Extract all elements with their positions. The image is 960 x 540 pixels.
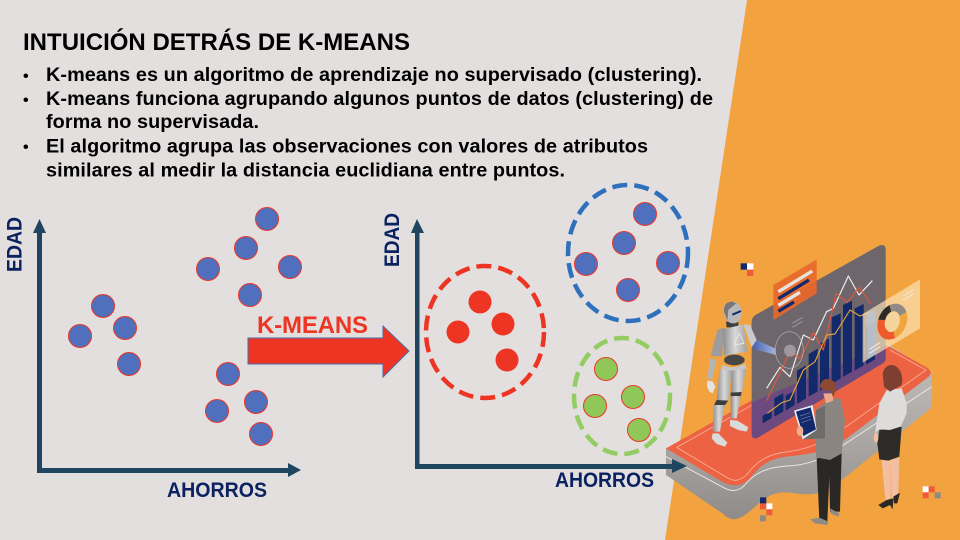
title: INTUICIÓN DETRÁS DE K-MEANS (23, 28, 410, 56)
left chart (4, 208, 301, 502)
right y-axis label: EDAD (381, 213, 404, 267)
analyst woman (874, 365, 907, 509)
bullet list: K-means es un algoritmo de aprendizaje no supervisado (clustering). (46, 64, 702, 86)
line chart (767, 276, 872, 413)
orange text card (773, 259, 817, 320)
left y-axis label: EDAD (4, 217, 27, 272)
right chart axes (411, 219, 687, 473)
bullet list: forma no supervisada. (46, 111, 259, 133)
small squares bottom (760, 497, 772, 521)
k-means label: K-MEANS (257, 312, 368, 339)
panel captions (792, 317, 803, 327)
donut card (863, 279, 920, 363)
tablet (794, 405, 817, 439)
bullet list: • (23, 139, 29, 156)
unclustered points (68, 208, 302, 446)
small squares right (923, 486, 941, 498)
blue cluster (568, 185, 688, 321)
bullet list: similares al medir la distancia euclidiana entre puntos. (46, 160, 565, 182)
small squares top (741, 263, 753, 276)
k-means arrow (248, 326, 409, 377)
dashboard panel (752, 245, 886, 438)
green cluster (574, 338, 670, 454)
platform (666, 343, 932, 519)
analyst man (794, 365, 907, 525)
bullet list (23, 64, 713, 182)
left chart axes (33, 219, 301, 477)
bar chart (763, 301, 875, 423)
robot (707, 302, 776, 447)
right x-axis label: AHORROS (555, 469, 654, 492)
donut chart (881, 305, 904, 339)
illustration: robot and analysts with dashboard (666, 245, 941, 525)
bullet list: • (23, 92, 29, 109)
left x-axis label: AHORROS (167, 479, 267, 502)
right chart (381, 185, 688, 492)
orange panel (665, 0, 960, 540)
hologram circle (775, 332, 803, 368)
bullet list: • (23, 68, 29, 85)
red cluster (426, 266, 544, 398)
bullet list: K-means funciona agrupando algunos puntos de datos (clustering) de (46, 88, 713, 110)
bullet list: El algoritmo agrupa las observaciones con valores de atributos (46, 136, 648, 158)
